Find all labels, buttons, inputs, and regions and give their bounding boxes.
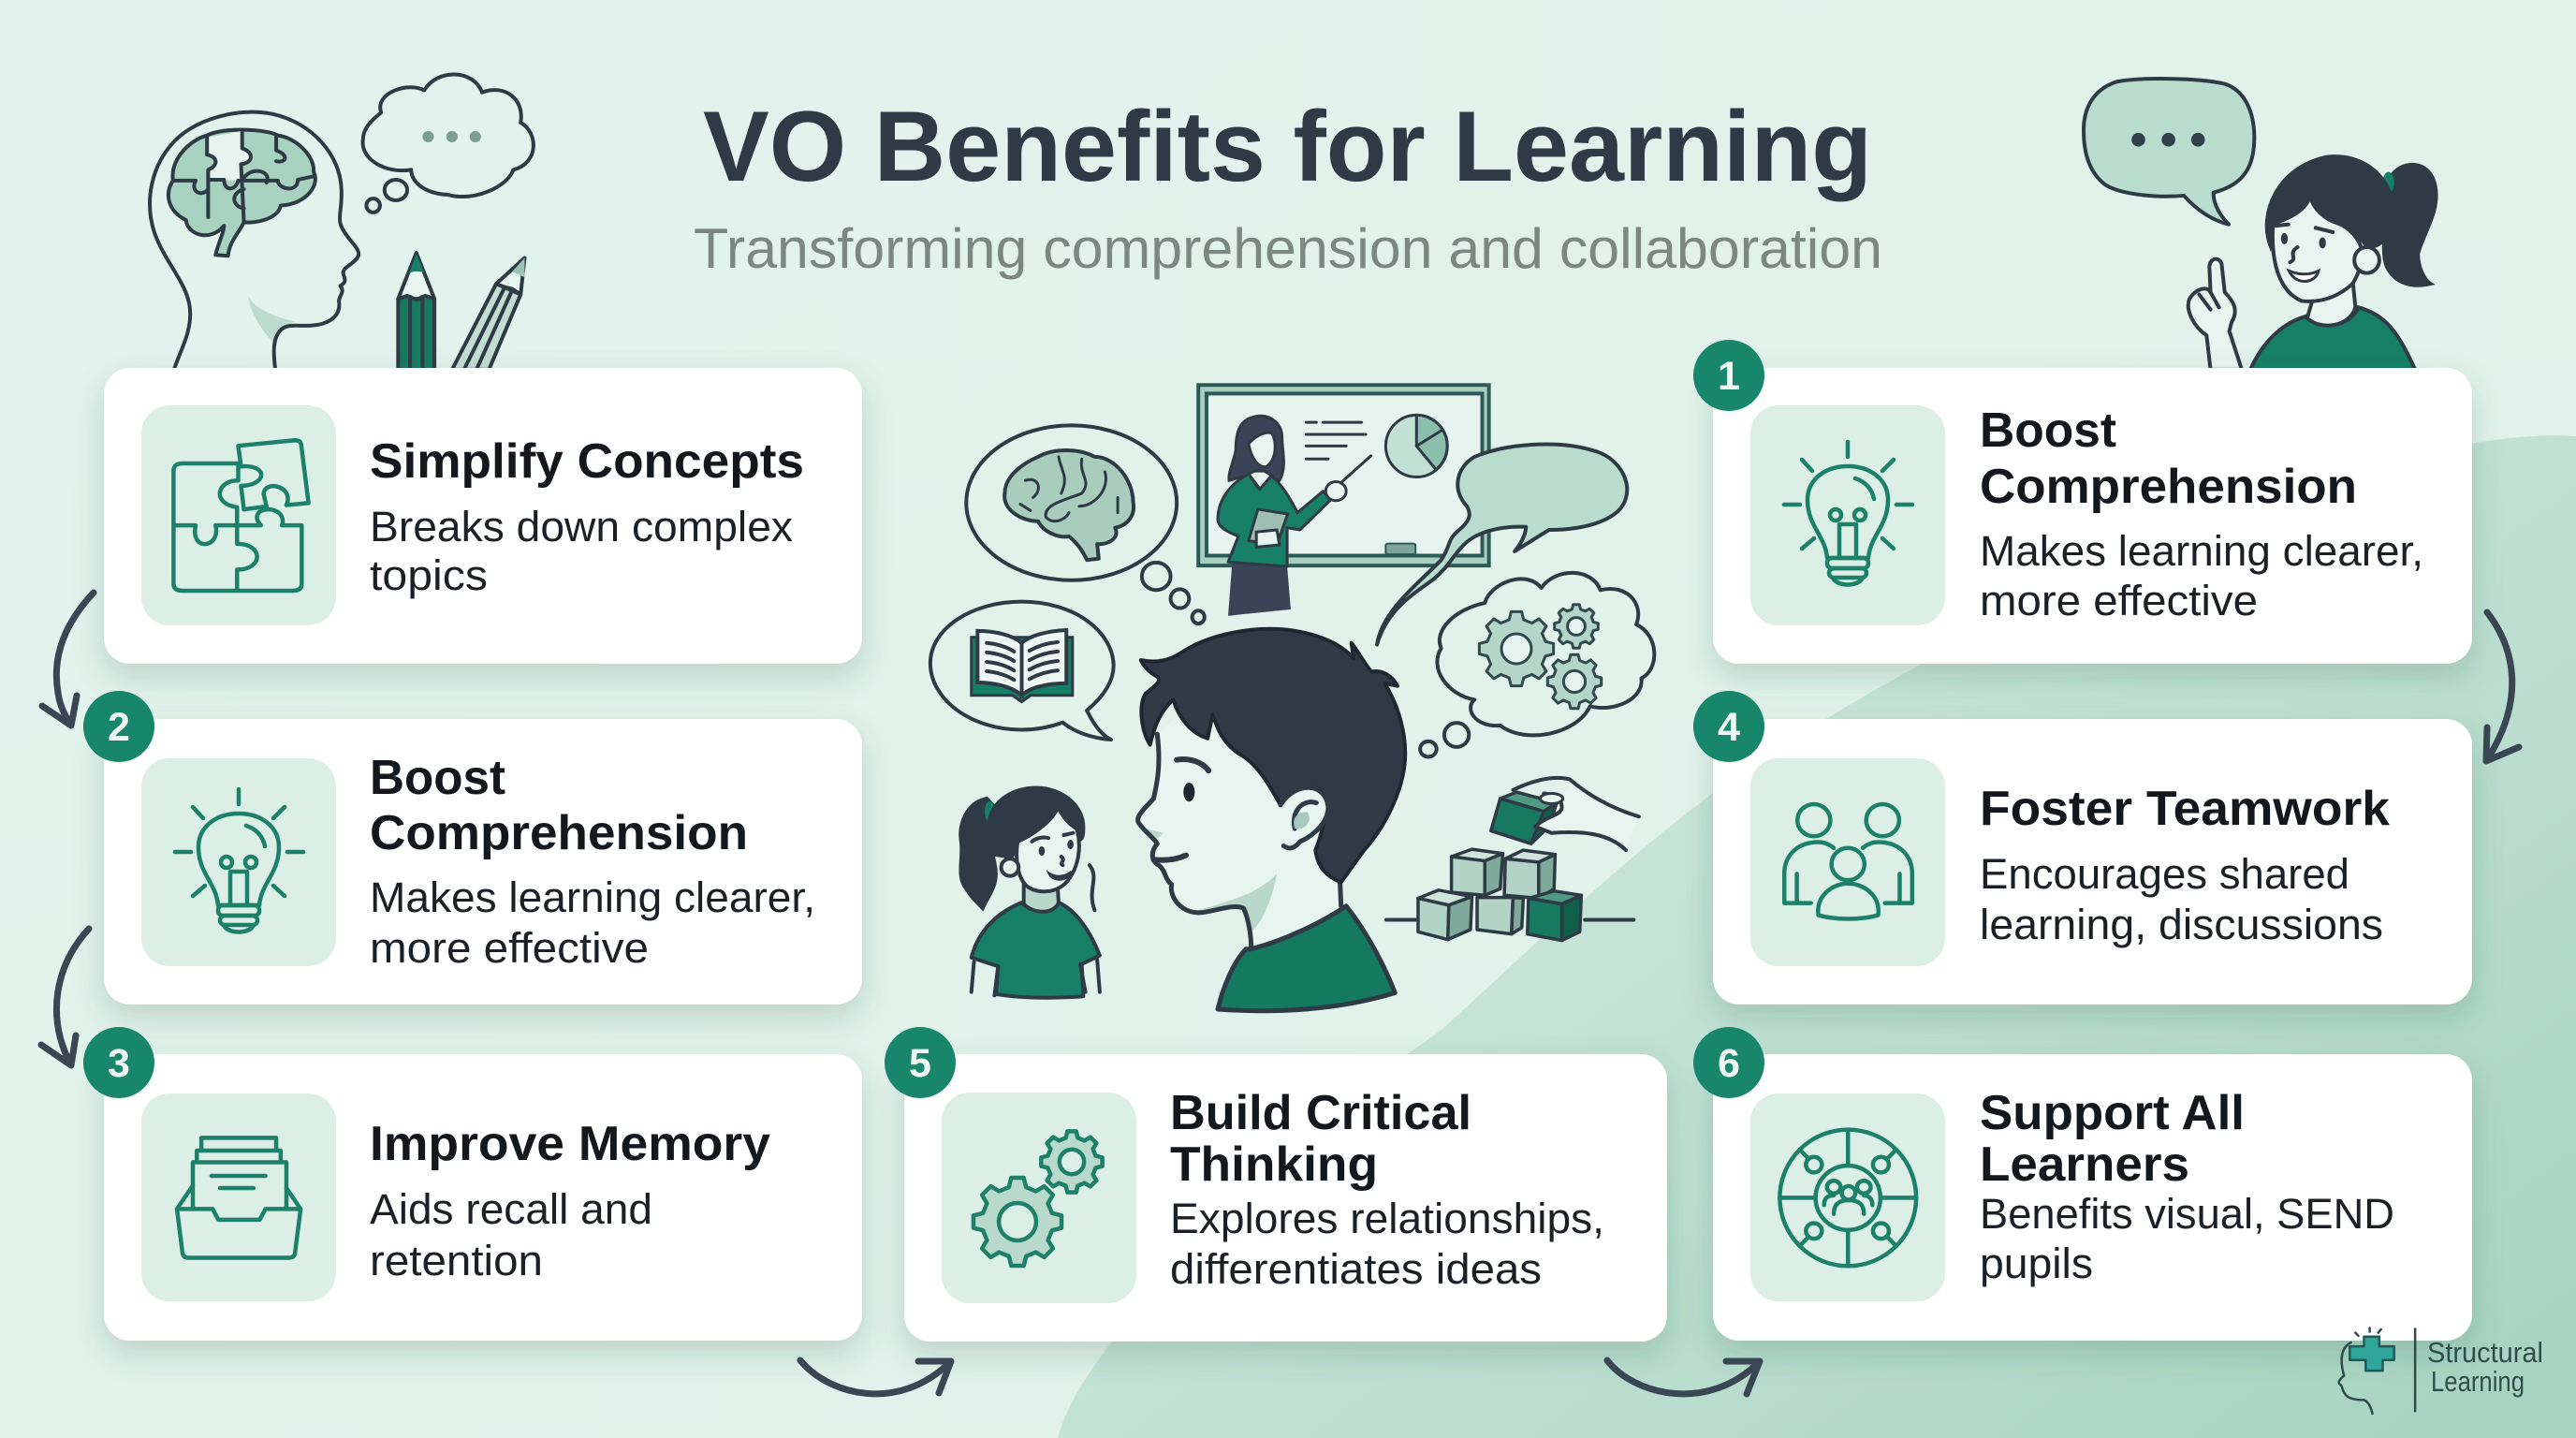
illustration: hand placing block [1513, 778, 1639, 850]
whiteboard with teacher [1198, 385, 1489, 616]
illustration: girl with speech bubble [2084, 79, 2437, 370]
heading: Improve Memory [370, 1117, 770, 1171]
illustration: head with puzzle brain [150, 112, 359, 368]
description [1980, 1190, 2394, 1287]
panel: Boost Comprehension (2) [104, 719, 862, 1005]
arrow: to 2 [42, 593, 94, 726]
thought cloud: gears [1420, 573, 1654, 756]
speech bubble, large [1377, 445, 1627, 645]
badge 4: 4 [1718, 705, 1740, 750]
badge 1 [1693, 340, 1764, 411]
description: Makes learning clearer, [370, 873, 815, 921]
description: topics [370, 551, 488, 599]
heading: Support All [1980, 1086, 2245, 1140]
icon: team [1750, 758, 1945, 966]
heading: Foster Teamwork [1980, 782, 2390, 836]
subtitle: Transforming comprehension and collaboration [694, 217, 1882, 280]
icon: inclusive circle [1750, 1093, 1945, 1301]
panel: Build Critical Thinking [904, 1054, 1667, 1342]
icon: light bulb [141, 758, 336, 966]
icon: light bulb [1750, 405, 1945, 625]
speech bubble: book [930, 602, 1114, 740]
panel: Improve Memory [104, 1054, 862, 1341]
description: Encourages shared [1980, 850, 2349, 898]
description: pupils [1980, 1240, 2093, 1287]
logo icon [2339, 1328, 2415, 1414]
badge 3 [83, 1027, 154, 1098]
description: retention [370, 1237, 543, 1284]
title: VO Benefits for Learning [703, 90, 1872, 202]
heading: Simplify Concepts [370, 434, 804, 489]
arrow: to 5 [800, 1360, 951, 1394]
heading: Boost [1980, 404, 2116, 458]
gears inside thought cloud [1479, 605, 1602, 709]
heading [370, 751, 748, 860]
logo text: Structural [2427, 1336, 2543, 1369]
heading: Thinking [1170, 1137, 1378, 1192]
icon: puzzle [141, 405, 336, 625]
description: more effective [1980, 577, 2258, 624]
badge 6: 6 [1718, 1041, 1740, 1086]
logo text: Learning [2431, 1365, 2525, 1398]
central illustration [930, 385, 1654, 756]
illustration: building blocks [1386, 792, 1633, 941]
background blob [1058, 435, 2576, 1438]
illustration: pencils [398, 253, 524, 370]
heading: Comprehension [370, 806, 748, 860]
description: learning, discussions [1980, 901, 2383, 948]
description [1980, 850, 2383, 948]
heading: Learners [1980, 1137, 2189, 1192]
icon: gears [942, 1093, 1136, 1303]
logo: Structural Learning [2339, 1328, 2543, 1414]
icon: card file box [141, 1093, 336, 1301]
heading: Boost [370, 751, 505, 805]
description [370, 1185, 652, 1284]
description: Benefits visual, SEND [1980, 1190, 2394, 1238]
description [1170, 1195, 1604, 1293]
panel: Boost Comprehension (1) [1713, 368, 2472, 664]
heading [1980, 1086, 2245, 1192]
illustration: thought cloud [363, 74, 534, 213]
illustration: small girl [960, 787, 1100, 998]
logo text [2427, 1336, 2543, 1398]
description: Breaks down complex [370, 503, 794, 550]
arrow: to 3 [41, 929, 89, 1065]
description [370, 503, 794, 599]
badge 2: 2 [108, 705, 130, 750]
badge 5 [885, 1027, 956, 1098]
speech bubble with dots [2084, 79, 2254, 225]
badge 2 [83, 691, 154, 762]
illustration: boy in profile [1138, 629, 1405, 1011]
description: differentiates ideas [1170, 1245, 1542, 1293]
description: Makes learning clearer, [1980, 527, 2423, 575]
description: Explores relationships, [1170, 1195, 1604, 1242]
thought bubble: brain [966, 425, 1205, 624]
arrow: to 6 [1607, 1360, 1760, 1394]
panel: Support All Learners [1713, 1054, 2472, 1341]
description [370, 873, 815, 972]
heading [1980, 404, 2357, 514]
heading [1170, 1086, 1471, 1192]
description: Aids recall and [370, 1185, 652, 1233]
badge 6 [1693, 1027, 1764, 1098]
badge 3: 3 [108, 1041, 130, 1086]
badge 5: 5 [909, 1041, 931, 1086]
heading: Comprehension [1980, 460, 2357, 514]
panel: Foster Teamwork [1713, 719, 2472, 1005]
description: more effective [370, 924, 649, 972]
heading: Build Critical [1170, 1086, 1471, 1140]
arrow: to 4 [2486, 612, 2519, 761]
panel: Simplify Concepts [104, 368, 862, 664]
description [1980, 527, 2423, 624]
badge 4 [1693, 691, 1764, 762]
badge 1: 1 [1718, 354, 1740, 399]
